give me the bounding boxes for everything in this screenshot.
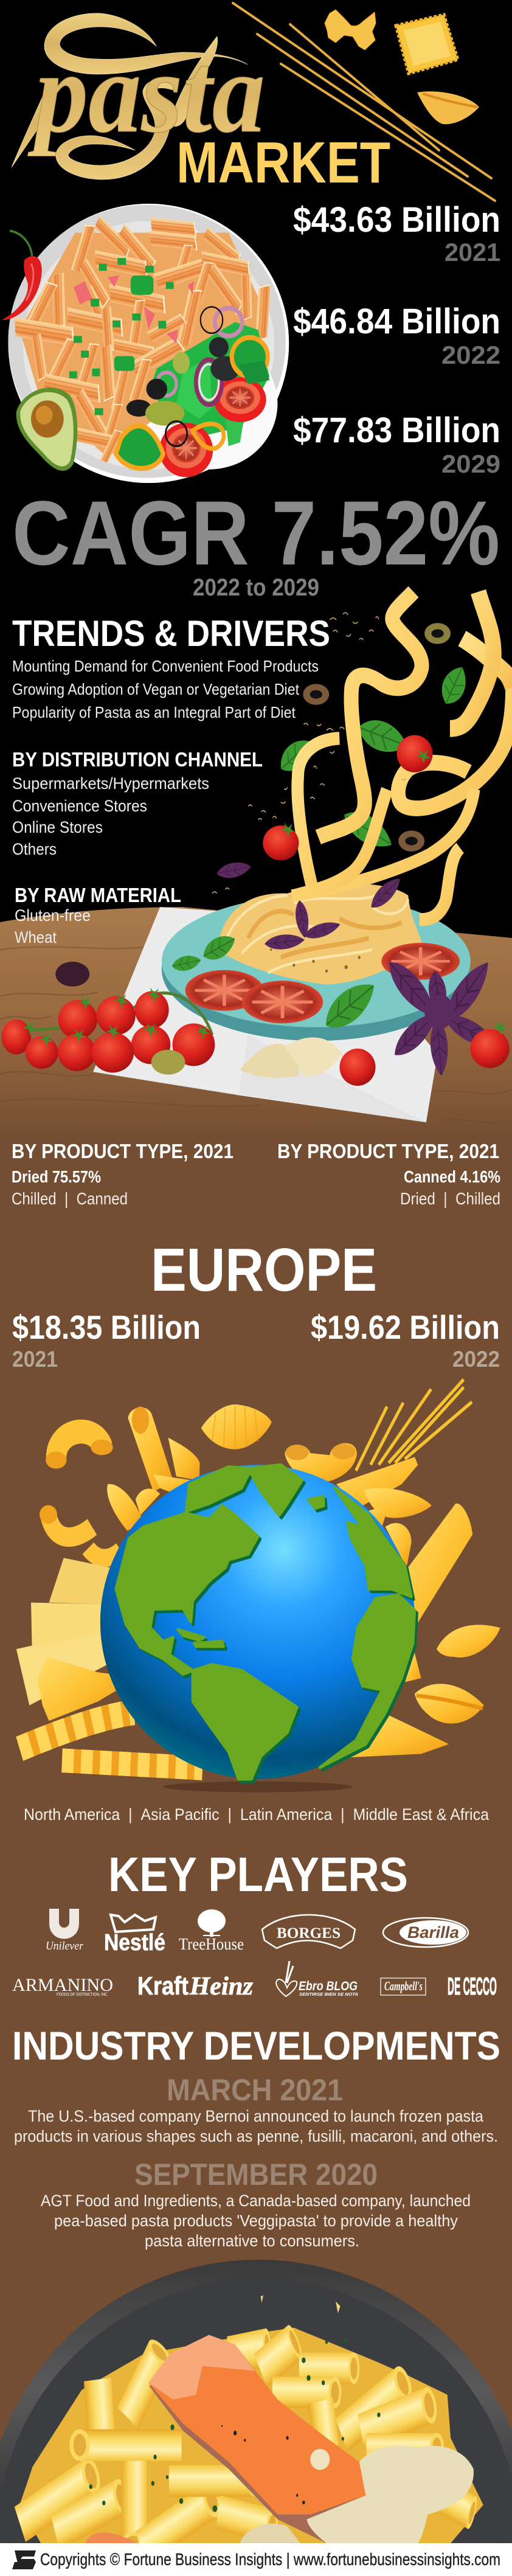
text: driver two: Growing Adoption of Vegan or Vegetarian Diet	[12, 680, 300, 698]
text: driver one: Mounting Demand for Convenient Food Products	[12, 657, 319, 675]
salmon fillet	[85, 2335, 402, 2543]
logo: Armanino: ARMANINO	[12, 1975, 113, 1995]
product type canned	[277, 1140, 500, 1208]
product type dried: Dried 75.57%	[12, 1167, 101, 1186]
heading: Europe: EUROPE	[151, 1236, 377, 1304]
icon: ravioli	[396, 15, 458, 74]
salad	[116, 307, 269, 477]
background: brown	[0, 1095, 512, 2576]
stat: 2029 market size: 2029	[441, 450, 500, 478]
napkin	[93, 907, 438, 1122]
logo: Ebro Blog: SENTIRSE BIEN SE NOTA	[299, 1993, 358, 1997]
stat: 2021 market size	[293, 200, 500, 266]
logo: Borges: BORGES	[277, 1925, 341, 1942]
text: other regions: North America | Asia Pacific | Latin America | Middle East & Africa	[24, 1805, 490, 1824]
text: channel list: Convenience Stores	[12, 797, 147, 815]
logo: Campbells	[381, 1978, 426, 1995]
teal plate	[162, 895, 471, 1041]
logo: Nestle: Nestlé	[104, 1930, 165, 1956]
text: channel list: Online Stores	[12, 818, 103, 836]
cheese	[240, 1037, 343, 1078]
purple basil	[216, 859, 501, 1077]
panel: penne and salmon pan illustration	[0, 2260, 512, 2565]
text: driver three: Popularity of Pasta as an Integral Part of Diet	[12, 703, 296, 721]
distribution channel section	[12, 748, 263, 858]
stat: 2022 market size: $46.84 Billion	[293, 302, 500, 341]
text: channel list: Supermarkets/Hypermarkets	[12, 774, 209, 793]
ground shadow	[163, 1782, 353, 1792]
ham pieces and herbs	[69, 258, 195, 415]
development: March 2021: The U.S.-based company Bernoi announced to launch frozen pasta	[28, 2107, 484, 2125]
logo: Campbells: Campbell's	[384, 1979, 423, 1993]
key player logos	[12, 1909, 497, 2001]
penne pile	[12, 215, 271, 465]
logo: TreeHouse	[179, 1909, 244, 1953]
heading: trends and drivers: TRENDS & DRIVERS	[12, 613, 330, 654]
raw material section	[15, 884, 181, 946]
pasta shapes behind globe	[16, 1380, 500, 1768]
development: March 2021: MARCH 2021	[167, 2073, 343, 2107]
stat: 2021 market size: 2021	[445, 238, 500, 266]
text: channel list: Others	[12, 840, 57, 858]
logo: Borges	[262, 1915, 355, 1948]
heading: raw material: BY RAW MATERIAL	[15, 884, 181, 906]
logo: Ebro Blog: Ebro BLOG	[299, 1979, 358, 1993]
tomato slices	[185, 943, 460, 1023]
icon: farfalle	[325, 10, 376, 50]
tomatoes	[2, 735, 510, 1086]
herb specks	[89, 2339, 381, 2512]
stat: Europe 2021: 2021	[12, 1347, 58, 1372]
heading: key players: KEY PLAYERS	[108, 1847, 408, 1901]
stat: 2029 market size: $77.83 Billion	[293, 411, 500, 450]
table setting	[0, 661, 512, 1123]
logo: Kraft Heinz	[137, 1971, 254, 2001]
development: March 2021	[14, 2073, 498, 2145]
footer bar	[0, 2543, 512, 2576]
pan	[0, 2260, 512, 2548]
stat: Europe 2022: 2022	[452, 1347, 500, 1372]
development: September 2020: SEPTEMBER 2020	[134, 2158, 378, 2192]
panel: pasta plate illustration	[2, 204, 289, 483]
product type dried: Chilled | Canned	[12, 1189, 128, 1208]
background: black	[0, 0, 512, 949]
development: September 2020: pasta alternative to consumers.	[145, 2232, 359, 2250]
logo: TreeHouse: TreeHouse	[179, 1935, 244, 1953]
wood grain	[0, 946, 512, 1123]
stat: Europe 2021: $18.35 Billion	[12, 1308, 201, 1346]
dish garnish	[2, 613, 510, 1086]
trends and drivers section	[12, 613, 330, 721]
logo: Barilla: Barilla	[407, 1923, 459, 1942]
stat: Europe 2021	[12, 1308, 201, 1372]
logo: Barilla	[383, 1918, 468, 1947]
logo: Kraft Heinz: Kraft	[137, 1971, 189, 2000]
heading: distribution channel: BY DISTRIBUTION CHANNEL	[12, 748, 263, 771]
icon: conchiglie	[417, 91, 479, 124]
logo: Unilever	[46, 1909, 84, 1953]
text: raw material list: Gluten-free	[15, 906, 91, 925]
product type dried: BY PRODUCT TYPE, 2021	[12, 1140, 234, 1162]
title logo: pasta lettering	[12, 13, 265, 179]
development: September 2020: AGT Food and Ingredients, a Canada-based company, launched	[41, 2192, 471, 2210]
title word: MARKET: MARKET	[176, 130, 390, 195]
stat: 2022 market size	[293, 302, 500, 369]
logo: Unilever: Unilever	[46, 1940, 84, 1953]
icon: chili pepper	[2, 231, 42, 320]
development: September 2020: pea-based pasta products 'Veggipasta' to provide a healthy	[54, 2212, 458, 2230]
falling tagliatelle ribbons	[292, 592, 512, 920]
icon: Fortune Business Insights logo	[12, 2550, 36, 2569]
development: September 2020	[41, 2158, 471, 2250]
green basil leaves	[171, 929, 381, 1038]
stat: 2029 market size	[293, 411, 500, 478]
wood table	[0, 907, 512, 1137]
text: channel list	[12, 774, 209, 858]
stat: Europe 2022	[311, 1308, 500, 1372]
panel: tagliatelle dish illustration	[0, 592, 512, 1123]
panel: globe with pasta illustration	[16, 1380, 500, 1792]
pasta crumbs	[212, 613, 406, 894]
text: raw material list	[15, 906, 91, 946]
title logo: pasta lettering: pasta	[27, 29, 265, 157]
logo: Nestle	[104, 1915, 165, 1956]
globe	[100, 1465, 417, 1782]
plate	[8, 204, 289, 483]
airborne green basil leaves	[275, 661, 472, 856]
icon: avocado	[16, 387, 77, 471]
olives	[55, 623, 451, 987]
logo: Armanino: FOODS OF DISTINCTION, INC.	[57, 1993, 108, 1997]
pasta nest	[217, 883, 422, 985]
stat: CAGR: 2022 to 2029	[193, 574, 319, 601]
cream sauce	[307, 2446, 474, 2543]
sauce patch	[240, 2524, 300, 2543]
spaghetti sticks	[233, 3, 495, 201]
penne	[15, 2322, 483, 2565]
text: raw material list: Wheat	[15, 928, 57, 946]
logo: Ebro Blog	[276, 1961, 358, 1997]
product type dried	[12, 1140, 234, 1208]
pasta flakes	[261, 2295, 341, 2313]
stat: 2022 market size: 2022	[441, 341, 500, 369]
stat: 2021 market size: $43.63 Billion	[293, 200, 500, 240]
logo: Kraft Heinz: Heinz	[189, 1973, 254, 2001]
